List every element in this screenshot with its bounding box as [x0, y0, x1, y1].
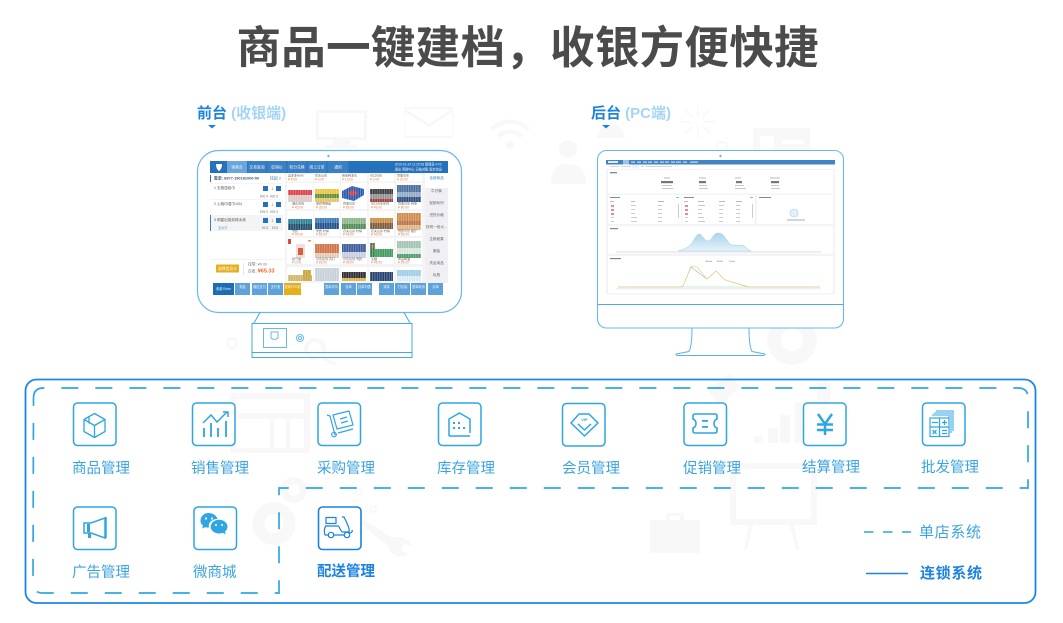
POS order list panel: 1: [272, 219, 274, 223]
POS category sidebar: 服装: [433, 248, 440, 253]
POS order list panel: ¥29.9: [260, 210, 268, 214]
POS product grid: [285, 172, 425, 283]
module: 库存管理: [437, 403, 495, 477]
product row 2: ¥ 85.00: [398, 232, 409, 236]
POS category sidebar: 洗浴用品: [429, 260, 444, 265]
POS bottom function buttons: 清单: [432, 284, 439, 289]
heading: back end (PC): 后台 (PC端): [591, 104, 671, 122]
POS monitor frame: [198, 150, 462, 312]
partial first row: ¥ 8.00: [288, 178, 297, 182]
module: 批发管理: 批发管理: [921, 459, 979, 476]
POS top navigation bar: 销售台: [231, 164, 243, 170]
product row 1: 康师傅爆品: [316, 200, 331, 206]
POS top navigation bar: 退出 帮助中心 日结对账 版本信息: [395, 166, 442, 172]
partial first row: ¥ 13.00: [342, 178, 353, 182]
POS bottom function buttons: 支付宝: [271, 284, 280, 289]
POS top navigation bar: 促销价: [271, 164, 283, 170]
module: 微商城: [193, 507, 237, 581]
module: 商品管理: 商品管理: [72, 460, 130, 477]
POS order list panel: 1 无极湿纸巾: [214, 185, 235, 190]
background watermark icons: [226, 105, 830, 556]
POS category sidebar: [425, 173, 448, 283]
dashboard header bar: [606, 160, 835, 169]
POS top navigation bar: 线上订单: [309, 164, 325, 170]
product row 3: 无糖: [371, 256, 377, 261]
POS bottom function buttons: 整单取消: [412, 284, 425, 289]
product row 3: [287, 238, 422, 264]
partial first row: 农夫山泉: [315, 172, 327, 178]
POS category sidebar: 全部商品: [429, 175, 444, 180]
module: 促销管理: 促销管理: [683, 460, 741, 477]
product row 2: 雪碧·柠檬: [316, 228, 329, 233]
module: 配送管理 (chain): [317, 507, 375, 580]
product row 4: [287, 267, 422, 281]
module: 销售管理: [191, 403, 249, 477]
PC stand: [676, 328, 765, 356]
POS terminal: [198, 150, 462, 358]
POS category sidebar: 牛仔裤: [431, 188, 442, 193]
product row 1: 百事可乐: [343, 200, 355, 206]
POS order list panel: 2 心相印湿巾10片: [214, 201, 243, 206]
heading: front end (POS): 前台 (收银端): [197, 104, 286, 122]
line chart: [608, 256, 833, 293]
product row 3: ¥ 39.00: [343, 260, 354, 264]
product row 1: 湘达米线: [292, 200, 304, 206]
partial first row: ¥ 20.00: [397, 178, 408, 182]
heading: front end (POS): [197, 104, 286, 128]
PC dashboard screen: [606, 160, 835, 294]
POS bottom function buttons: 微信支付: [253, 284, 267, 289]
product row 2: 农夫山泉·柠檬: [343, 228, 362, 233]
product row 3: 可乐系列·苏打: [316, 256, 335, 261]
product row 3: 可乐系列·雪碧: [343, 256, 362, 261]
product row 1: [287, 183, 422, 209]
POS category sidebar: 特别一段大...: [426, 224, 447, 229]
POS order list panel: 1: [272, 203, 274, 207]
product row 1: ¥ 69.00: [343, 205, 354, 209]
product row 1: ¥ 80.00: [398, 205, 409, 209]
POS bottom function buttons: 打包袋: [398, 284, 408, 289]
product row 3: 青岛啤酒: [398, 256, 410, 261]
product row 1: ¥ 35.00: [316, 205, 327, 209]
area chart: [608, 226, 833, 254]
POS bottom function buttons: 选择POS机: [284, 284, 301, 289]
module: 采购管理: [317, 403, 375, 477]
legend: single store: [864, 524, 981, 541]
module: 会员管理: VIP: [581, 417, 588, 422]
product row 2: ¥ 49.00: [371, 232, 382, 236]
product row 2: 雪碧可乐·橙汁: [398, 228, 417, 233]
product row 2: ¥ 49.00: [292, 232, 303, 236]
product row 3: ¥ 3.00: [292, 260, 301, 264]
partial first row: 怡宝纯净水: [342, 172, 357, 178]
POS bottom function buttons: 收款 Enter: [216, 286, 232, 291]
module: 广告管理: 广告管理: [72, 564, 130, 581]
POS top navigation bar: [210, 161, 448, 173]
POS order list panel: 选择会员卡: [218, 266, 237, 271]
POS top navigation bar: 通用: [334, 164, 342, 170]
POS order list panel: 应收: ¥65.33: [248, 268, 275, 274]
POS order list panel: 3 明星出挑双珠冰淇: [214, 217, 246, 222]
POS category sidebar: 生鲜蔬果: [429, 236, 444, 241]
POS order list panel: ¥3.5: [272, 226, 278, 230]
POS order list panel: ¥3.5: [262, 226, 268, 230]
legend: chain: [866, 564, 982, 582]
partial first row: 喜多多8090: [288, 172, 304, 178]
ranking tables: [608, 195, 833, 224]
PC monitor frame: [598, 150, 844, 328]
POS bottom function buttons: [213, 283, 443, 295]
main feature panel outline: [26, 380, 1036, 603]
product row 1: ¥ 49.00: [371, 205, 382, 209]
POS order list panel: 找零: ¥0.00: [248, 262, 267, 266]
POS bottom function buttons: 挂单: [345, 284, 352, 289]
module: 会员管理: [562, 404, 620, 477]
business overview card: [608, 170, 833, 194]
POS category sidebar: 进货价格: [429, 212, 444, 217]
product row 2: [287, 211, 422, 236]
module: 库存管理: 库存管理: [437, 460, 495, 477]
POS stand and base: [252, 312, 412, 358]
module: 结算管理: [802, 403, 860, 476]
module: 结算管理: 结算管理: [802, 459, 860, 476]
POS bottom function buttons: 现金: [239, 284, 246, 289]
product row 2: 农夫山泉·柠檬: [371, 228, 390, 233]
partial first row: 百事可乐: [397, 172, 409, 178]
module: 会员管理: 会员管理: [562, 460, 620, 477]
POS order list panel: ¥29.9: [270, 210, 278, 214]
module: 微商城: 微商城: [193, 564, 237, 581]
POS top navigation bar: 2019-01-24 11:20:53 管理员-FXC: [395, 162, 443, 166]
POS order list panel: 五公斤: [218, 225, 228, 230]
partial first row: ¥ 2.00: [370, 178, 379, 182]
module: 销售管理: 销售管理: [191, 460, 249, 477]
single-store dashed boundary: [33, 388, 1028, 593]
product row 1: ¥ 45.00: [292, 205, 303, 209]
POS category sidebar: 促销系列: [429, 200, 444, 205]
product row 3: ¥ 69.00: [398, 260, 409, 264]
POS order list panel: 整单: 8877-190181000-00: [214, 176, 259, 180]
title: 商品一键建档，收银方便快捷: [236, 24, 818, 73]
POS order list panel: ¥20.9: [260, 194, 268, 198]
module: 促销管理: [683, 403, 741, 477]
product row 3: ¥ 28.00: [316, 260, 327, 264]
partial first row: 可口可乐: [370, 172, 382, 178]
POS top navigation bar: 交易查询: [249, 164, 265, 170]
legend: single store: 单店系统: [919, 524, 981, 541]
module: 配送管理 (chain): 配送管理: [317, 562, 375, 580]
module: 广告管理: [72, 507, 130, 581]
POS top navigation bar: 积分兑换: [289, 164, 305, 170]
product row 2: ¥ 65.00: [316, 232, 327, 236]
POS category sidebar: 玩具: [433, 272, 440, 277]
module: 采购管理: 采购管理: [317, 460, 375, 477]
product row 1: 百事可乐·纯净: [398, 200, 417, 206]
POS order list panel: 1: [272, 187, 274, 191]
product row 3: 煤气罐: [292, 256, 301, 261]
product row 1: 可口可乐系列: [371, 200, 389, 206]
POS order list panel: [210, 173, 283, 283]
module: 商品管理: [72, 403, 130, 477]
product row 2: 雪碧: [292, 228, 298, 233]
legend: chain: 连锁系统: [920, 564, 982, 582]
product row 2: ¥ 49.00: [343, 232, 354, 236]
POS bottom function buttons: 挂单列表: [358, 284, 372, 289]
partial first row: ¥ 3.00: [315, 178, 324, 182]
partial first row: [287, 172, 422, 182]
POS bottom function buttons: 整单折扣: [325, 284, 338, 289]
module: 批发管理: [921, 403, 979, 476]
heading: back end (PC): [591, 104, 671, 128]
POS bottom function buttons: 抹零: [383, 284, 390, 289]
POS order list panel: 挂起 2: [270, 176, 281, 180]
product row 3: ¥ 45.00: [371, 260, 382, 264]
POS order list panel: ¥20.9: [270, 194, 278, 198]
PC monitor: [598, 150, 844, 356]
